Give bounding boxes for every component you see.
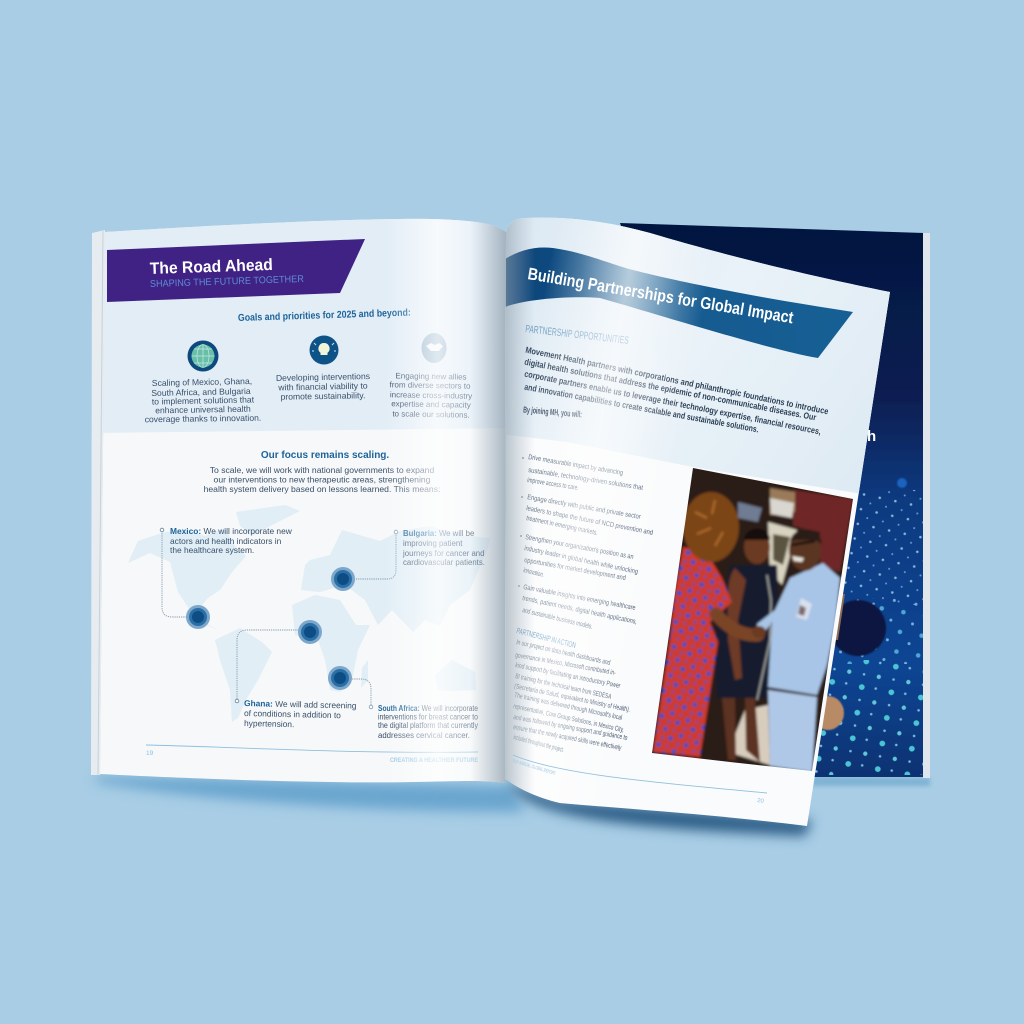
- greenland: [236, 505, 300, 536]
- man: trousers: [768, 690, 817, 772]
- focus paragraph: To scale, we will work with national governments to expand: [210, 465, 434, 475]
- goal 1: [145, 340, 261, 424]
- callout: ghana: hypertension.: [244, 718, 294, 729]
- banner title: The Road Ahead: [150, 256, 273, 278]
- goal 1 text: coverage thanks to innovation.: [145, 413, 261, 424]
- focus paragraph: our interventions to new therapeutic areas, strengthening: [214, 474, 431, 484]
- footer label: CREATING A HEALTHIER FUTURE: [390, 757, 478, 764]
- goal 1 text: South Africa, and Bulgaria: [151, 386, 251, 398]
- callout: ghana: Ghana: We will add screening: [244, 698, 357, 711]
- handshake: [752, 626, 766, 638]
- footer left: [146, 745, 478, 764]
- bullet list: Engage directly with public and private sector: [527, 494, 642, 521]
- goal 1 text: to implement solutions that: [152, 394, 255, 407]
- goal 3 text: to scale our solutions.: [392, 409, 470, 420]
- callout: bulgaria: journeys for cancer and: [402, 549, 484, 558]
- goal 2: [276, 336, 370, 402]
- bullet list: sustainable, technology-driven solutions that: [528, 467, 643, 492]
- bullet list: improve access to care.: [527, 477, 579, 492]
- goal 3 text: expertise and capacity: [391, 399, 471, 410]
- callout: bulgaria: cardiovascular patients.: [403, 558, 485, 567]
- man: head: [789, 529, 821, 571]
- callout: bulgaria: [394, 529, 485, 567]
- banner: building partnerships: [505, 247, 853, 358]
- icon: globe: [188, 340, 218, 372]
- bullet list: Strengthen your organization's position as an: [525, 534, 634, 561]
- callout: mexico: the healthcare system.: [170, 545, 254, 555]
- callout: south africa: interventions for breast cancer to: [378, 712, 479, 722]
- case study paragraph: ensure that the newly acquired skills were effectively: [513, 724, 622, 752]
- intro paragraph: and innovation capabilities to create scalable and sustainable solutions.: [524, 382, 760, 434]
- intro paragraph: digital health solutions that address the epidemic of non-communicable diseases. Our: [524, 357, 818, 423]
- focus paragraph: health system delivery based on lessons learned. This means:: [204, 484, 440, 494]
- eurasia: [301, 526, 490, 632]
- cover portrait fragment: [812, 594, 886, 730]
- north america: [128, 528, 246, 630]
- callout: mexico: actors and health indicators in: [170, 536, 282, 546]
- case study paragraph: representative, Core Group Solutions, in Mexico City,: [513, 703, 625, 734]
- bullet list: Drive measurable impact by advancing: [528, 454, 624, 477]
- woman left: hair: [683, 492, 739, 562]
- page number 19: 19: [146, 750, 154, 757]
- right page: [500, 210, 900, 840]
- cover text fragment: th: [862, 428, 876, 445]
- intro paragraph: By joining MH, you will:: [523, 405, 583, 419]
- callout: bulgaria: improving patient: [403, 539, 463, 548]
- page number 20: 20: [757, 798, 765, 805]
- partnership photo: [640, 460, 865, 780]
- banner: the road ahead: [107, 239, 365, 302]
- bullet list: Gain valuable insights into emerging healthcare: [523, 584, 636, 612]
- world map: [128, 505, 490, 722]
- footer report label: 2024 ANNUAL GLOBAL REPORT: [511, 758, 556, 777]
- woman left: dress: [653, 547, 732, 757]
- heading: partnership opportunities: PARTNERSHIP OPPORTUNITIES: [525, 323, 629, 347]
- heading: focus: Our focus remains scaling.: [261, 450, 389, 461]
- woman left: arm: [716, 614, 758, 635]
- intro paragraph: corporate partners enable us to leverage their technology expertise, financial resources,: [524, 369, 822, 437]
- back cover page: [620, 223, 930, 778]
- icon: handshake: [422, 333, 446, 363]
- goal 1 text: [145, 376, 261, 424]
- case study paragraph: (Secretaria de Salud, equivalent to Ministry of Health).: [514, 683, 631, 714]
- cover dot pattern: [815, 478, 923, 775]
- callout: bulgaria: Bulgaria: We will be: [403, 529, 474, 538]
- map pin: mexico: [186, 605, 210, 629]
- goal 3 text: increase cross-industry: [390, 390, 472, 401]
- bullet list: leaders to shape the future of NCD prevention and: [526, 505, 654, 537]
- man: kurta: [757, 563, 840, 695]
- focus paragraph: [204, 465, 440, 494]
- connector lines: [162, 531, 396, 707]
- goal 1 text: enhance universal health: [155, 404, 251, 415]
- map pin: ghana: [298, 620, 322, 644]
- left page: [90, 210, 520, 800]
- goal 2 text: Developing interventions: [276, 371, 370, 383]
- floor: [728, 705, 770, 765]
- callout: south africa: [369, 704, 479, 740]
- case study paragraph: [512, 639, 631, 754]
- map pin: bulgaria: [331, 567, 355, 591]
- south america: [215, 628, 272, 722]
- goal 3: [390, 333, 472, 420]
- shelving: [770, 488, 795, 515]
- bullet list: treatment in emerging markets.: [526, 515, 599, 537]
- map pin: south africa: [328, 666, 352, 690]
- case study paragraph: governance in Mexico, Microsoft contributed in-: [515, 652, 617, 677]
- heading: partnership in action: PARTNERSHIP IN ACTION: [516, 626, 577, 650]
- footer right: [511, 755, 767, 805]
- right banner title: Building Partnerships for Global Impact: [526, 264, 795, 327]
- goal 3 text: [390, 371, 472, 420]
- callout: south africa: South Africa: We will incorporate: [378, 704, 478, 713]
- heading: goals: Goals and priorities for 2025 and beyond:: [238, 308, 411, 324]
- callout: mexico: [160, 526, 293, 555]
- callout: south africa: addresses cervical cancer.: [378, 731, 470, 740]
- callout: ghana: [235, 698, 357, 729]
- case study paragraph: included throughout the project.: [512, 734, 565, 754]
- goal 2 text: promote sustainability.: [280, 390, 365, 402]
- banner subtitle: SHAPING THE FUTURE TOGETHER: [150, 274, 304, 290]
- case study paragraph: and was followed by ongoing support and guidance to: [513, 714, 628, 742]
- bullet list: opportunities for market development and: [524, 557, 626, 582]
- brochure: [90, 210, 930, 840]
- callout: mexico: Mexico: We will incorporate new: [170, 526, 293, 536]
- bullet list: innovation.: [523, 567, 545, 579]
- bullet list: trends, patient needs, digital health applications,: [522, 595, 638, 626]
- goal 2 text: with financial viability to: [277, 381, 368, 392]
- woman right: dress: [713, 565, 780, 698]
- bullet list: and sustainable business models.: [522, 607, 593, 631]
- case study paragraph: In our project on data health dashboards and: [516, 639, 611, 667]
- callout: ghana: of conditions in addition to: [244, 708, 341, 720]
- goal 3 text: Engaging new allies: [395, 371, 467, 382]
- australia: [448, 660, 476, 691]
- brochure shadow: [96, 776, 930, 836]
- icon: light bulb: [310, 336, 338, 364]
- goal 2 text: [276, 371, 370, 402]
- callout: south africa: the digital platform that currently: [378, 721, 478, 730]
- goal 3 text: from diverse sectors to: [390, 380, 471, 391]
- bullet list: [518, 454, 654, 631]
- red wall: [793, 490, 853, 572]
- bullet list: industry leader in global health while unlocking: [524, 545, 639, 576]
- woman right: head: [744, 530, 770, 564]
- intro paragraph: Movement Health partners with corporations and philanthropic foundations to introduce: [525, 345, 829, 416]
- case study paragraph: BI training for the technical team from SEDESA: [515, 673, 612, 701]
- goal 1 text: Scaling of Mexico, Ghana,: [152, 376, 252, 388]
- case study paragraph: The training was delivered through Microsoft's local: [514, 692, 623, 722]
- africa: [292, 595, 370, 692]
- case study paragraph: kind support by facilitating an introductory Power: [515, 662, 621, 690]
- right page gloss: [500, 210, 900, 840]
